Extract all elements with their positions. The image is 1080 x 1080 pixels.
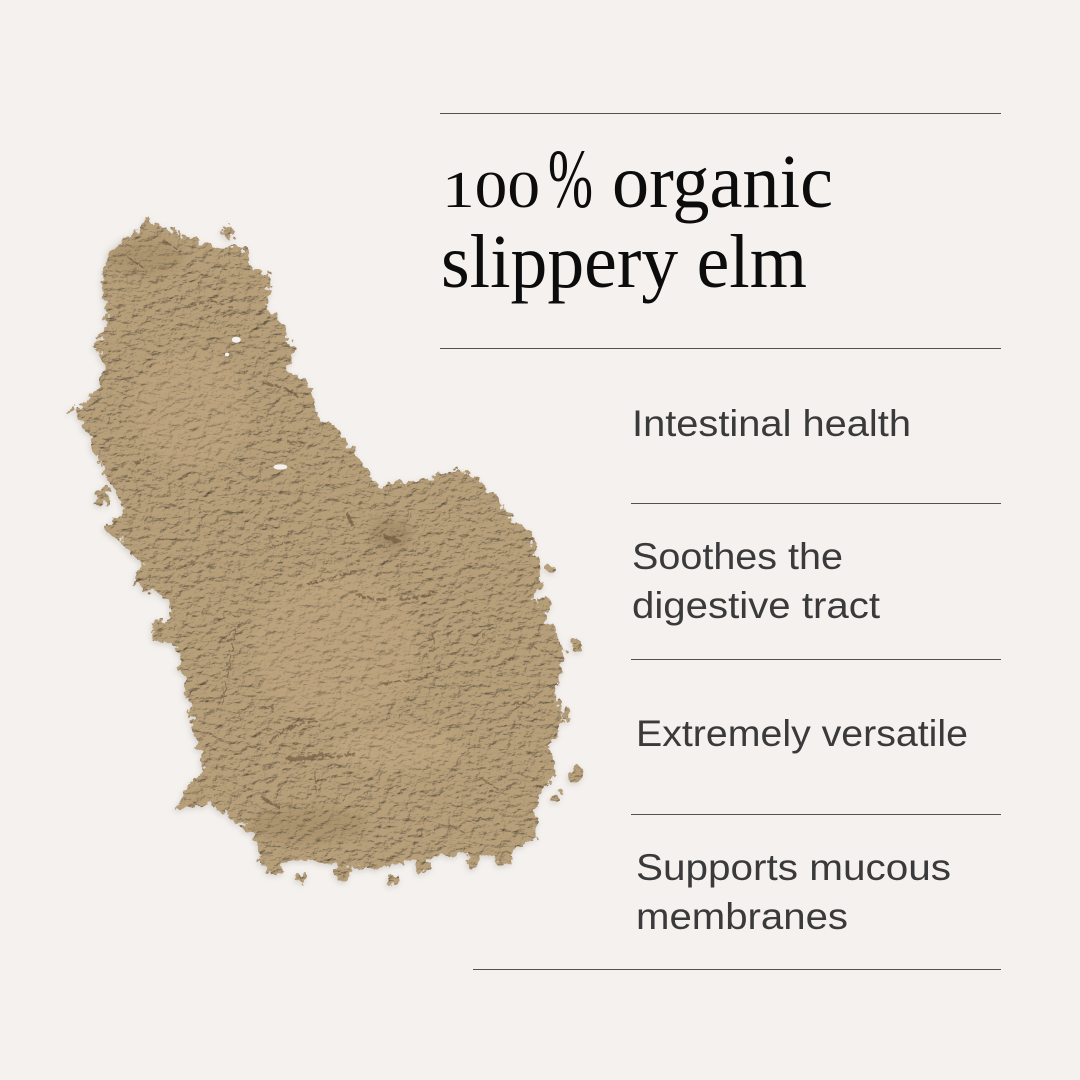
title: 100 [442, 162, 540, 219]
benefit: supports mucous membranes: Supports mucous [636, 846, 951, 888]
benefit: soothes the digestive tract: digestive tract [632, 584, 881, 626]
benefit: intestinal health: Intestinal health [632, 402, 911, 444]
benefit: supports mucous membranes [636, 846, 951, 937]
benefit: soothes the digestive tract: Soothes the [632, 535, 843, 577]
powder gaps [225, 337, 287, 470]
powder cracks [129, 240, 537, 834]
title [441, 133, 833, 304]
title: organic [612, 140, 833, 224]
benefit: extremely versatile: Extremely versatile [636, 712, 968, 754]
title: % [548, 133, 593, 226]
title: slippery elm [441, 220, 807, 304]
benefit: soothes the digestive tract [632, 535, 881, 626]
tonal shading [108, 240, 463, 843]
benefit: supports mucous membranes: membranes [636, 895, 848, 937]
powder pile [68, 218, 583, 886]
